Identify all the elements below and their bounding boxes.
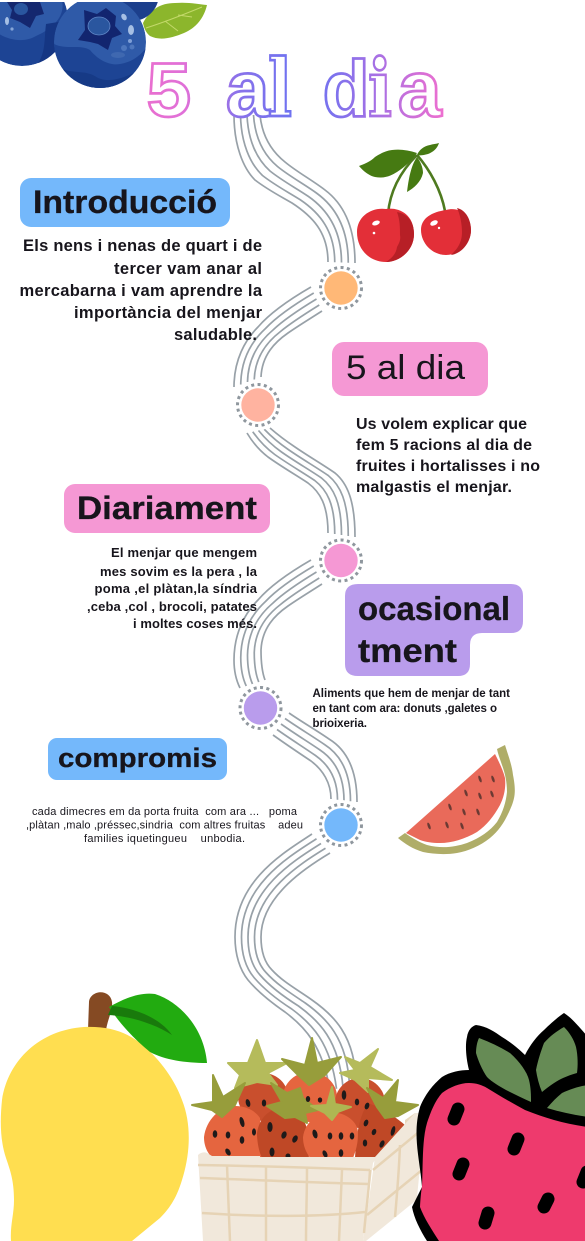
basket back rim	[405, 1113, 424, 1135]
text block: malgastis el menjar.	[356, 479, 512, 496]
back berries	[238, 1072, 385, 1128]
left cherry	[357, 209, 414, 262]
heading box	[64, 484, 270, 533]
seeds	[427, 775, 495, 830]
text block: fem 5 racions al dia de	[356, 437, 532, 454]
text block	[312, 688, 510, 730]
leaf	[143, 3, 207, 39]
right cherry	[421, 209, 471, 255]
title: a	[396, 50, 444, 141]
leaf vein	[108, 1006, 172, 1035]
title: i	[368, 41, 392, 135]
text block: Aliments que hem de menjar de tant	[312, 688, 510, 700]
heading box	[345, 584, 523, 676]
title: a	[224, 50, 272, 141]
text block: ,plàtan ,malo ,préssec,sindria com altres fruitas adeu	[26, 820, 303, 832]
small leaf	[417, 143, 439, 155]
icon: mango	[1, 992, 207, 1241]
basket front	[198, 1152, 377, 1241]
back caps	[228, 1038, 392, 1092]
text block	[356, 416, 540, 496]
heading: Diariament	[77, 490, 257, 526]
text block: mercabarna i vam aprendre la	[20, 282, 263, 300]
title: l	[268, 41, 292, 135]
winding line: node 5 to basket	[235, 834, 356, 1090]
winding line: title to first node	[234, 115, 355, 263]
flesh	[406, 754, 505, 843]
text block: Els nens i nenas de quart i de	[23, 237, 262, 255]
text block	[26, 806, 303, 845]
panel: Introducció	[20, 178, 263, 344]
back berry	[122, 2, 158, 20]
text block: cada dimecres em da porta fruita com ara ... poma	[32, 806, 298, 818]
big berry	[54, 0, 146, 92]
seeds	[454, 1109, 585, 1223]
leaf	[109, 994, 207, 1063]
panel: 5 al dia	[332, 342, 540, 496]
node 5	[316, 800, 366, 850]
text block: ,ceba ,col , brocoli, patates	[87, 599, 257, 614]
fruit body	[1, 1027, 189, 1241]
big leaf	[359, 150, 417, 178]
node 1	[316, 263, 366, 313]
heading: ocasional	[358, 590, 510, 627]
front berries	[204, 1103, 408, 1158]
winding line: node 2 to node 3	[247, 428, 355, 537]
middle leaf	[407, 157, 423, 192]
basket weave	[198, 1127, 425, 1241]
panel: ocasionalment	[312, 584, 523, 730]
seeds	[213, 1090, 396, 1158]
heading box	[332, 342, 488, 396]
heading: Introducció	[33, 184, 217, 220]
text block: mes sovim es la pera , la	[100, 564, 258, 579]
leaves	[476, 1027, 585, 1117]
icon: watermelon	[398, 745, 515, 854]
basket side	[363, 1113, 425, 1241]
text block	[87, 545, 258, 631]
heading	[358, 590, 510, 669]
winding line: node 3 to node 4	[234, 560, 322, 688]
rind	[398, 745, 515, 854]
heading: tment	[358, 632, 457, 669]
text block: families iquetingueu unbodia.	[84, 833, 245, 845]
text block	[20, 237, 263, 344]
text block: tercer vam anar al	[114, 260, 262, 278]
title: 5	[145, 50, 193, 141]
stems	[388, 155, 445, 214]
text block: saludable.	[174, 326, 257, 344]
text block: brioixeria.	[312, 718, 367, 730]
icon: blueberries	[0, 0, 207, 92]
text block: fruites i hortalisses i no	[356, 458, 540, 475]
icon: cherries	[357, 143, 471, 262]
heading: compromis	[58, 743, 217, 773]
node 3	[316, 536, 366, 586]
node 4	[236, 683, 286, 733]
winding line: node 4 to node 5	[273, 713, 357, 802]
heading box	[20, 178, 230, 227]
node 2	[233, 380, 283, 430]
title	[145, 41, 444, 141]
text block: importància del menjar	[74, 304, 263, 322]
stem	[88, 992, 112, 1030]
front caps	[192, 1075, 418, 1123]
body	[420, 1083, 585, 1241]
text block: El menjar que mengem	[111, 545, 257, 560]
text block: poma ,el plàtan,la síndria	[94, 581, 258, 596]
text block: i moltes coses més.	[133, 616, 257, 631]
left berry	[0, 0, 70, 66]
icon: strawberry basket	[192, 1038, 425, 1241]
text block: en tant com ara: donuts ,galetes o	[312, 703, 497, 715]
panel: Diariament	[64, 484, 270, 631]
outline	[412, 1013, 585, 1241]
text block: Us volem explicar que	[356, 416, 527, 433]
winding line: node 1 to node 2	[234, 287, 322, 387]
panel: compromis	[26, 738, 303, 845]
heading: 5 al dia	[346, 349, 465, 387]
heading box	[48, 738, 227, 780]
title: d	[322, 50, 370, 141]
icon: big strawberry	[412, 1013, 585, 1241]
